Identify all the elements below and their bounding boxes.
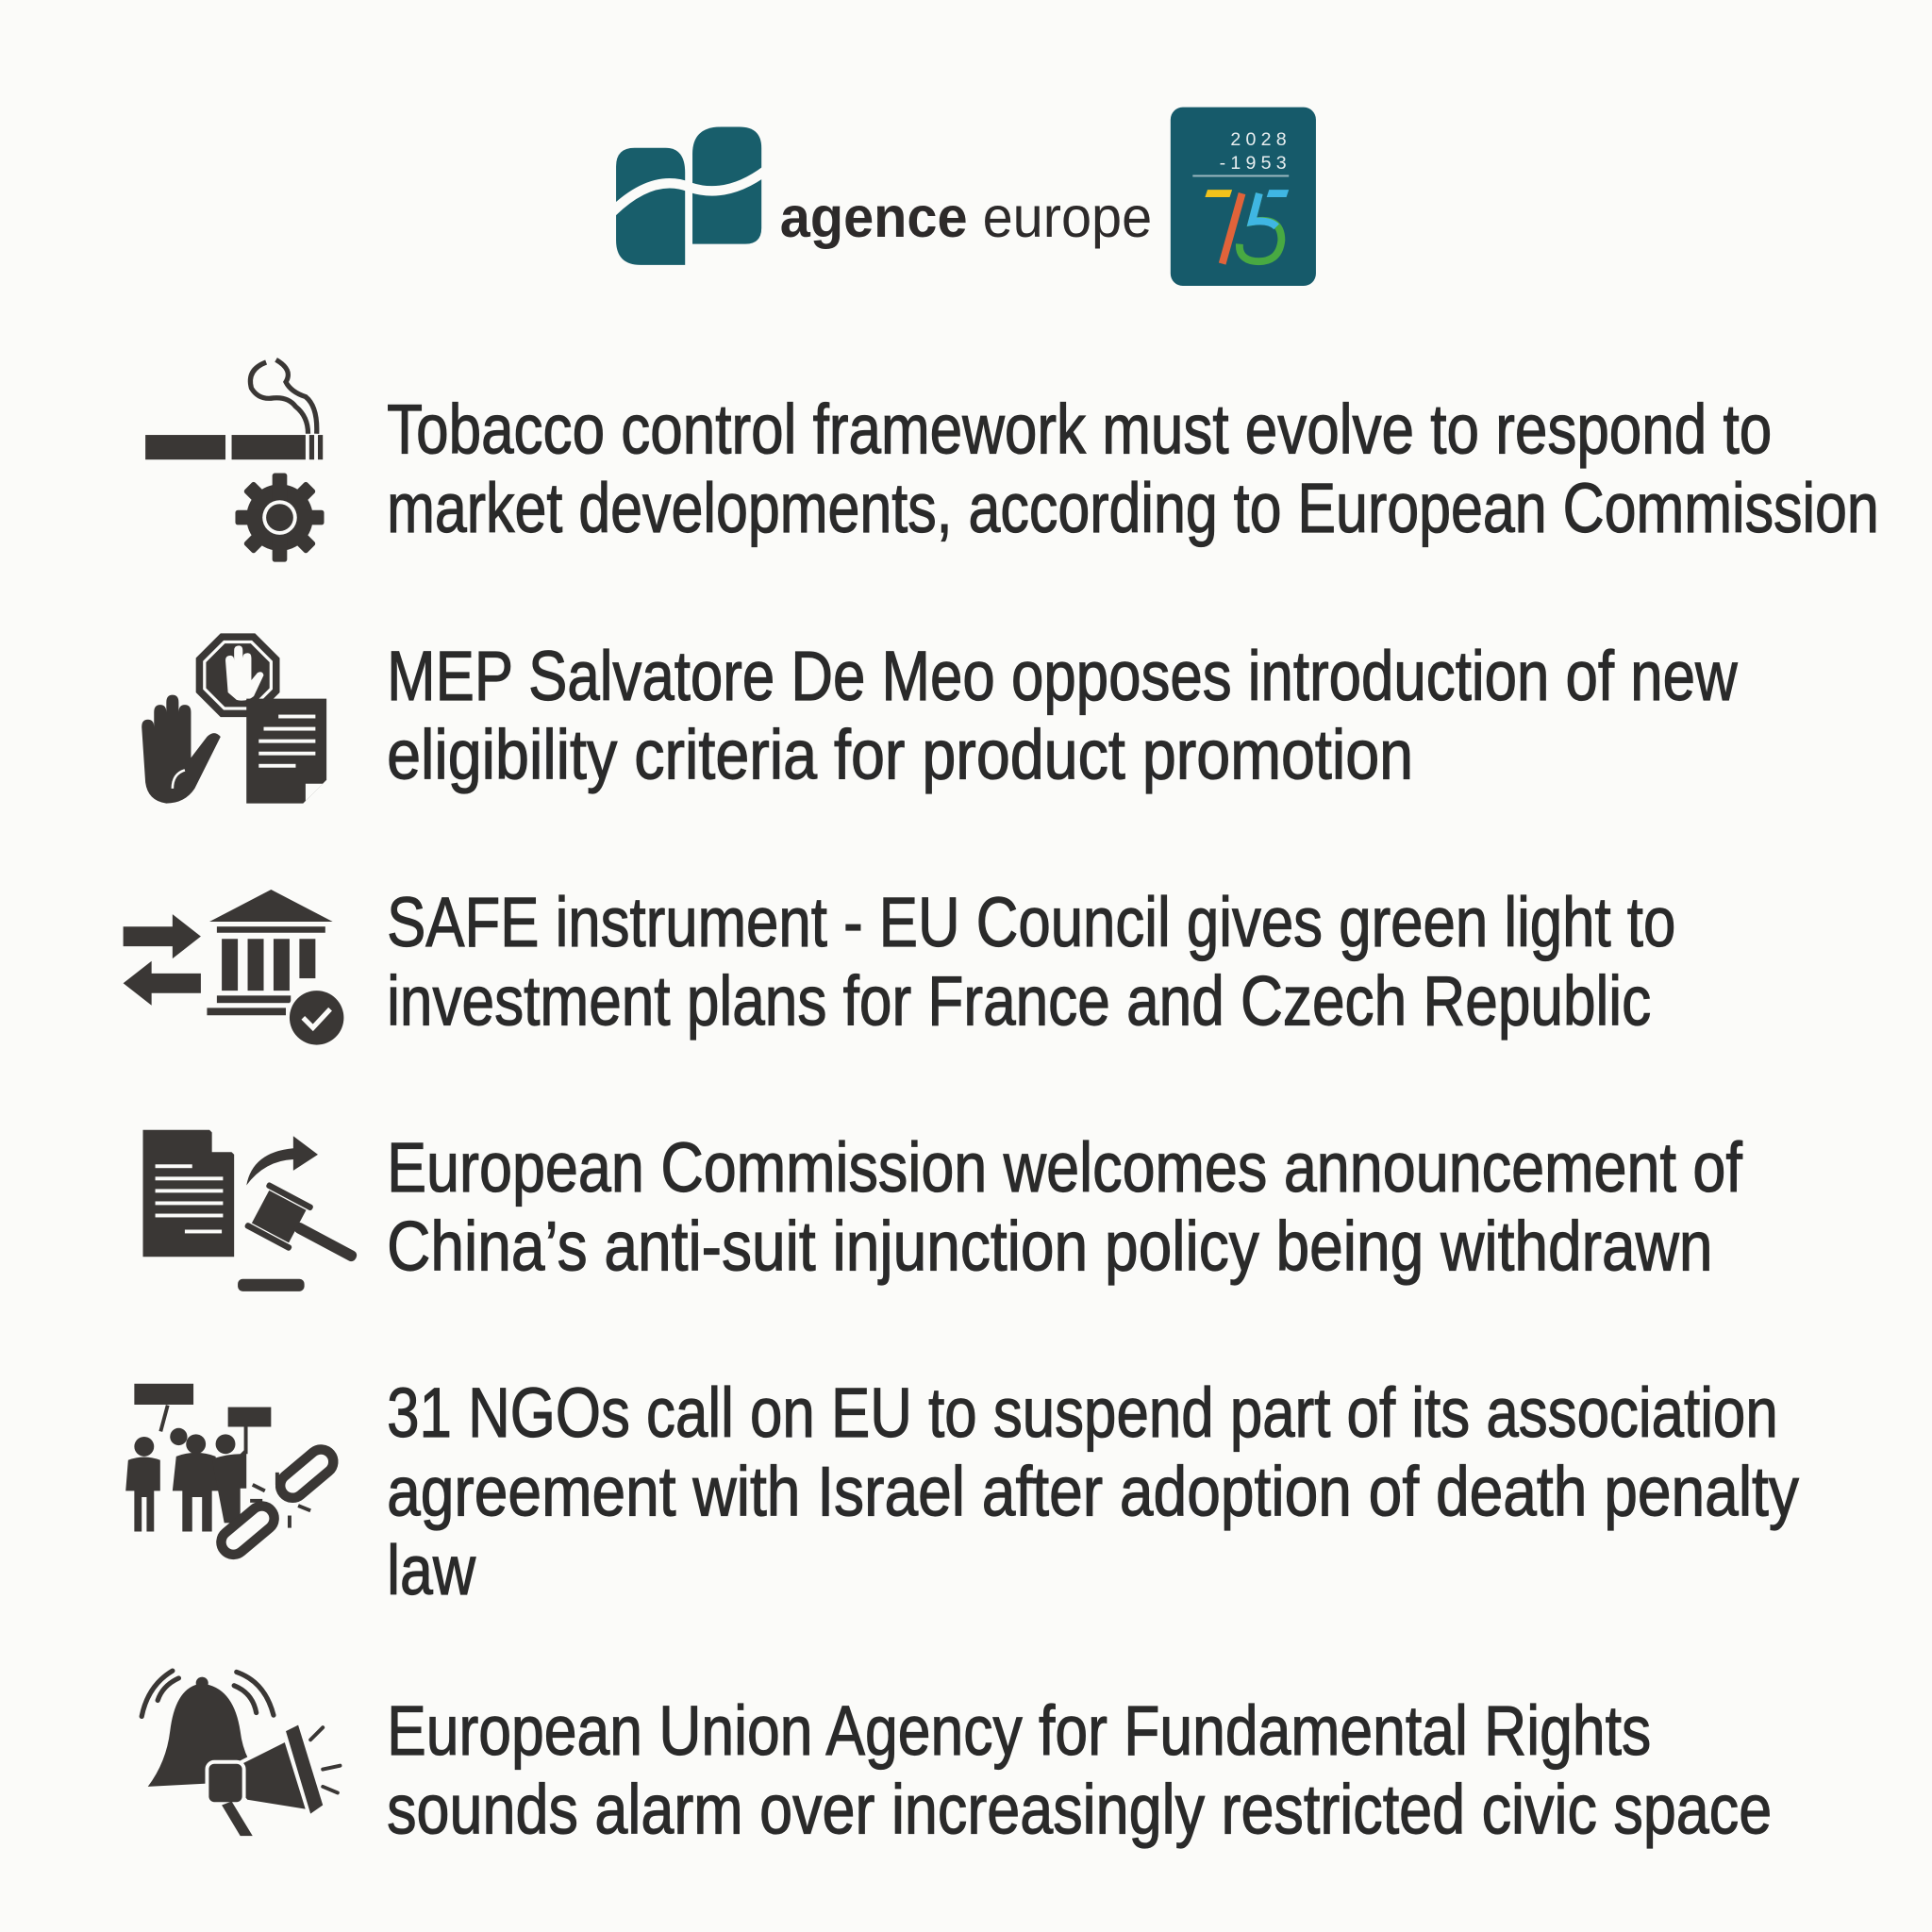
text: headline 3: SAFE instrument - EU Council gives green light to bbox=[387, 883, 1675, 961]
icon: document, arrow and gavel bbox=[143, 1130, 368, 1291]
text: headline 6: European Union Agency for Fundamental Rights bbox=[387, 1691, 1651, 1770]
icon: alarm bell and megaphone bbox=[142, 1671, 340, 1836]
text: headline 3: investment plans for France and Czech Republic bbox=[387, 962, 1651, 1041]
text: headline 2 bbox=[387, 637, 1738, 793]
icon: cigarette and gear bbox=[145, 359, 325, 562]
text: headline 5: law bbox=[387, 1531, 475, 1609]
text: headline 1 bbox=[387, 391, 1879, 547]
text: headline 2: eligibility criteria for product promotion bbox=[387, 715, 1413, 793]
icon: arrows and bank with check bbox=[124, 890, 347, 1049]
badge: 75 years: -1953 bbox=[1220, 153, 1291, 174]
text: headline 4 bbox=[387, 1128, 1742, 1286]
text: headline 3 bbox=[387, 883, 1675, 1041]
badge: 75 years: 2028 bbox=[1230, 129, 1291, 150]
text: headline 4: China’s anti-suit injunction policy being withdrawn bbox=[387, 1208, 1713, 1286]
logo mark bbox=[612, 127, 766, 265]
badge: 75 years bbox=[1171, 108, 1316, 286]
icon: protesters and broken chain bbox=[125, 1384, 339, 1559]
text: headline 5 bbox=[387, 1374, 1800, 1609]
logo: agence europe bbox=[612, 127, 1152, 265]
logo text: agence europe bbox=[780, 185, 1152, 250]
text: headline 6 bbox=[387, 1691, 1772, 1849]
icon: stop hand and document bbox=[142, 633, 326, 804]
